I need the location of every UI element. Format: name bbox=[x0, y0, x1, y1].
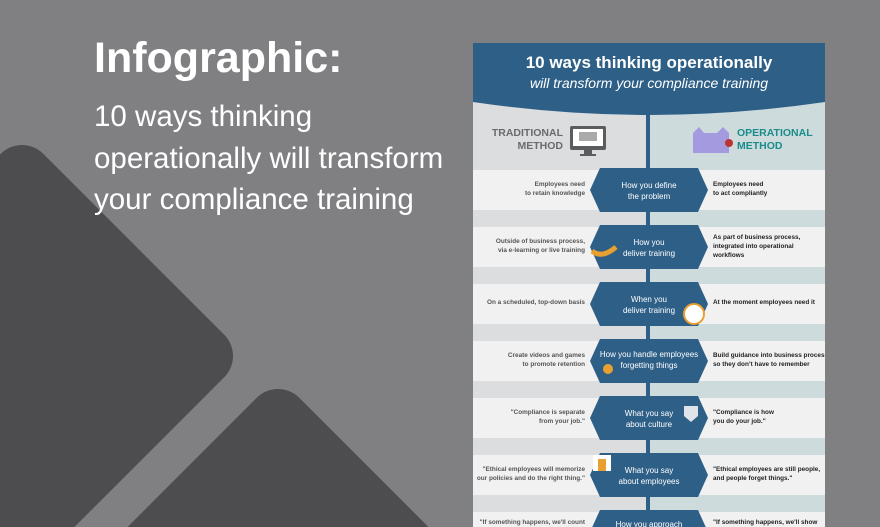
row 2: How you bbox=[633, 238, 665, 247]
row 6: "Ethical employees will memorize bbox=[483, 466, 585, 473]
row 1: to act compliantly bbox=[713, 190, 767, 197]
row 3: At the moment employees need it bbox=[713, 299, 815, 306]
infographic panel bbox=[473, 43, 825, 527]
rows bbox=[477, 168, 825, 527]
row 4: How you handle employees bbox=[600, 350, 698, 359]
row 7 bbox=[480, 510, 818, 527]
row 6: our policies and do the right thing." bbox=[477, 475, 585, 482]
row 1: How you define bbox=[621, 181, 677, 190]
row 2: via e-learning or live training bbox=[498, 247, 585, 254]
row 1: Employees need bbox=[713, 181, 763, 188]
row 4 bbox=[508, 339, 825, 383]
row 3: On a scheduled, top-down basis bbox=[487, 299, 585, 306]
row 6 bbox=[477, 453, 820, 497]
title: Infographic: bbox=[94, 34, 342, 82]
row 5: "Compliance is separate bbox=[511, 409, 585, 416]
row 7: "If something happens, we'll count bbox=[480, 519, 585, 526]
row 4: to promote retention bbox=[523, 361, 585, 368]
row 2: workflows bbox=[713, 252, 744, 259]
row 7: "If something happens, we'll show bbox=[713, 519, 817, 526]
row 1: Employees need bbox=[535, 181, 585, 188]
operational method heading: METHOD bbox=[737, 140, 782, 152]
row 3: deliver training bbox=[623, 306, 675, 315]
row 4: Create videos and games bbox=[508, 352, 585, 359]
row 1 bbox=[525, 168, 768, 212]
header text bbox=[526, 53, 772, 91]
row 5: you do your job." bbox=[713, 418, 766, 425]
row 2: Outside of business process, bbox=[496, 238, 585, 245]
icon: cat mascot bbox=[693, 127, 733, 153]
row 5: from your job." bbox=[539, 418, 585, 425]
header text: will transform your compliance training bbox=[530, 75, 768, 91]
row 1: to retain knowledge bbox=[525, 190, 585, 197]
row 2: deliver training bbox=[623, 249, 675, 258]
operational method heading: OPERATIONAL bbox=[737, 127, 813, 139]
row 6: about employees bbox=[619, 477, 679, 486]
row 4: so they don’t have to remember bbox=[713, 361, 810, 368]
row 6: What you say bbox=[625, 466, 673, 475]
row 5 bbox=[511, 396, 774, 440]
row 5: "Compliance is how bbox=[713, 409, 774, 416]
row 5: What you say bbox=[625, 409, 673, 418]
row 6: and people forget things." bbox=[713, 475, 792, 482]
row 2 bbox=[496, 225, 800, 269]
subtitle: 10 ways thinking operationally will transform your compliance training bbox=[94, 100, 443, 216]
row 3: When you bbox=[631, 295, 667, 304]
header text: 10 ways thinking operationally bbox=[526, 53, 772, 72]
icon: monitor bbox=[570, 126, 606, 156]
row 4: forgetting things bbox=[621, 361, 677, 370]
row 3 bbox=[487, 282, 815, 326]
row 2: integrated into operational bbox=[713, 243, 794, 250]
row 1: the problem bbox=[628, 192, 670, 201]
traditional method heading: TRADITIONAL METHOD bbox=[492, 127, 563, 152]
operational method heading bbox=[737, 127, 813, 152]
row 6: "Ethical employees are still people, bbox=[713, 466, 820, 473]
row 5: about culture bbox=[626, 420, 672, 429]
row 2: As part of business process, bbox=[713, 234, 800, 241]
row 4: Build guidance into business process bbox=[713, 352, 825, 359]
